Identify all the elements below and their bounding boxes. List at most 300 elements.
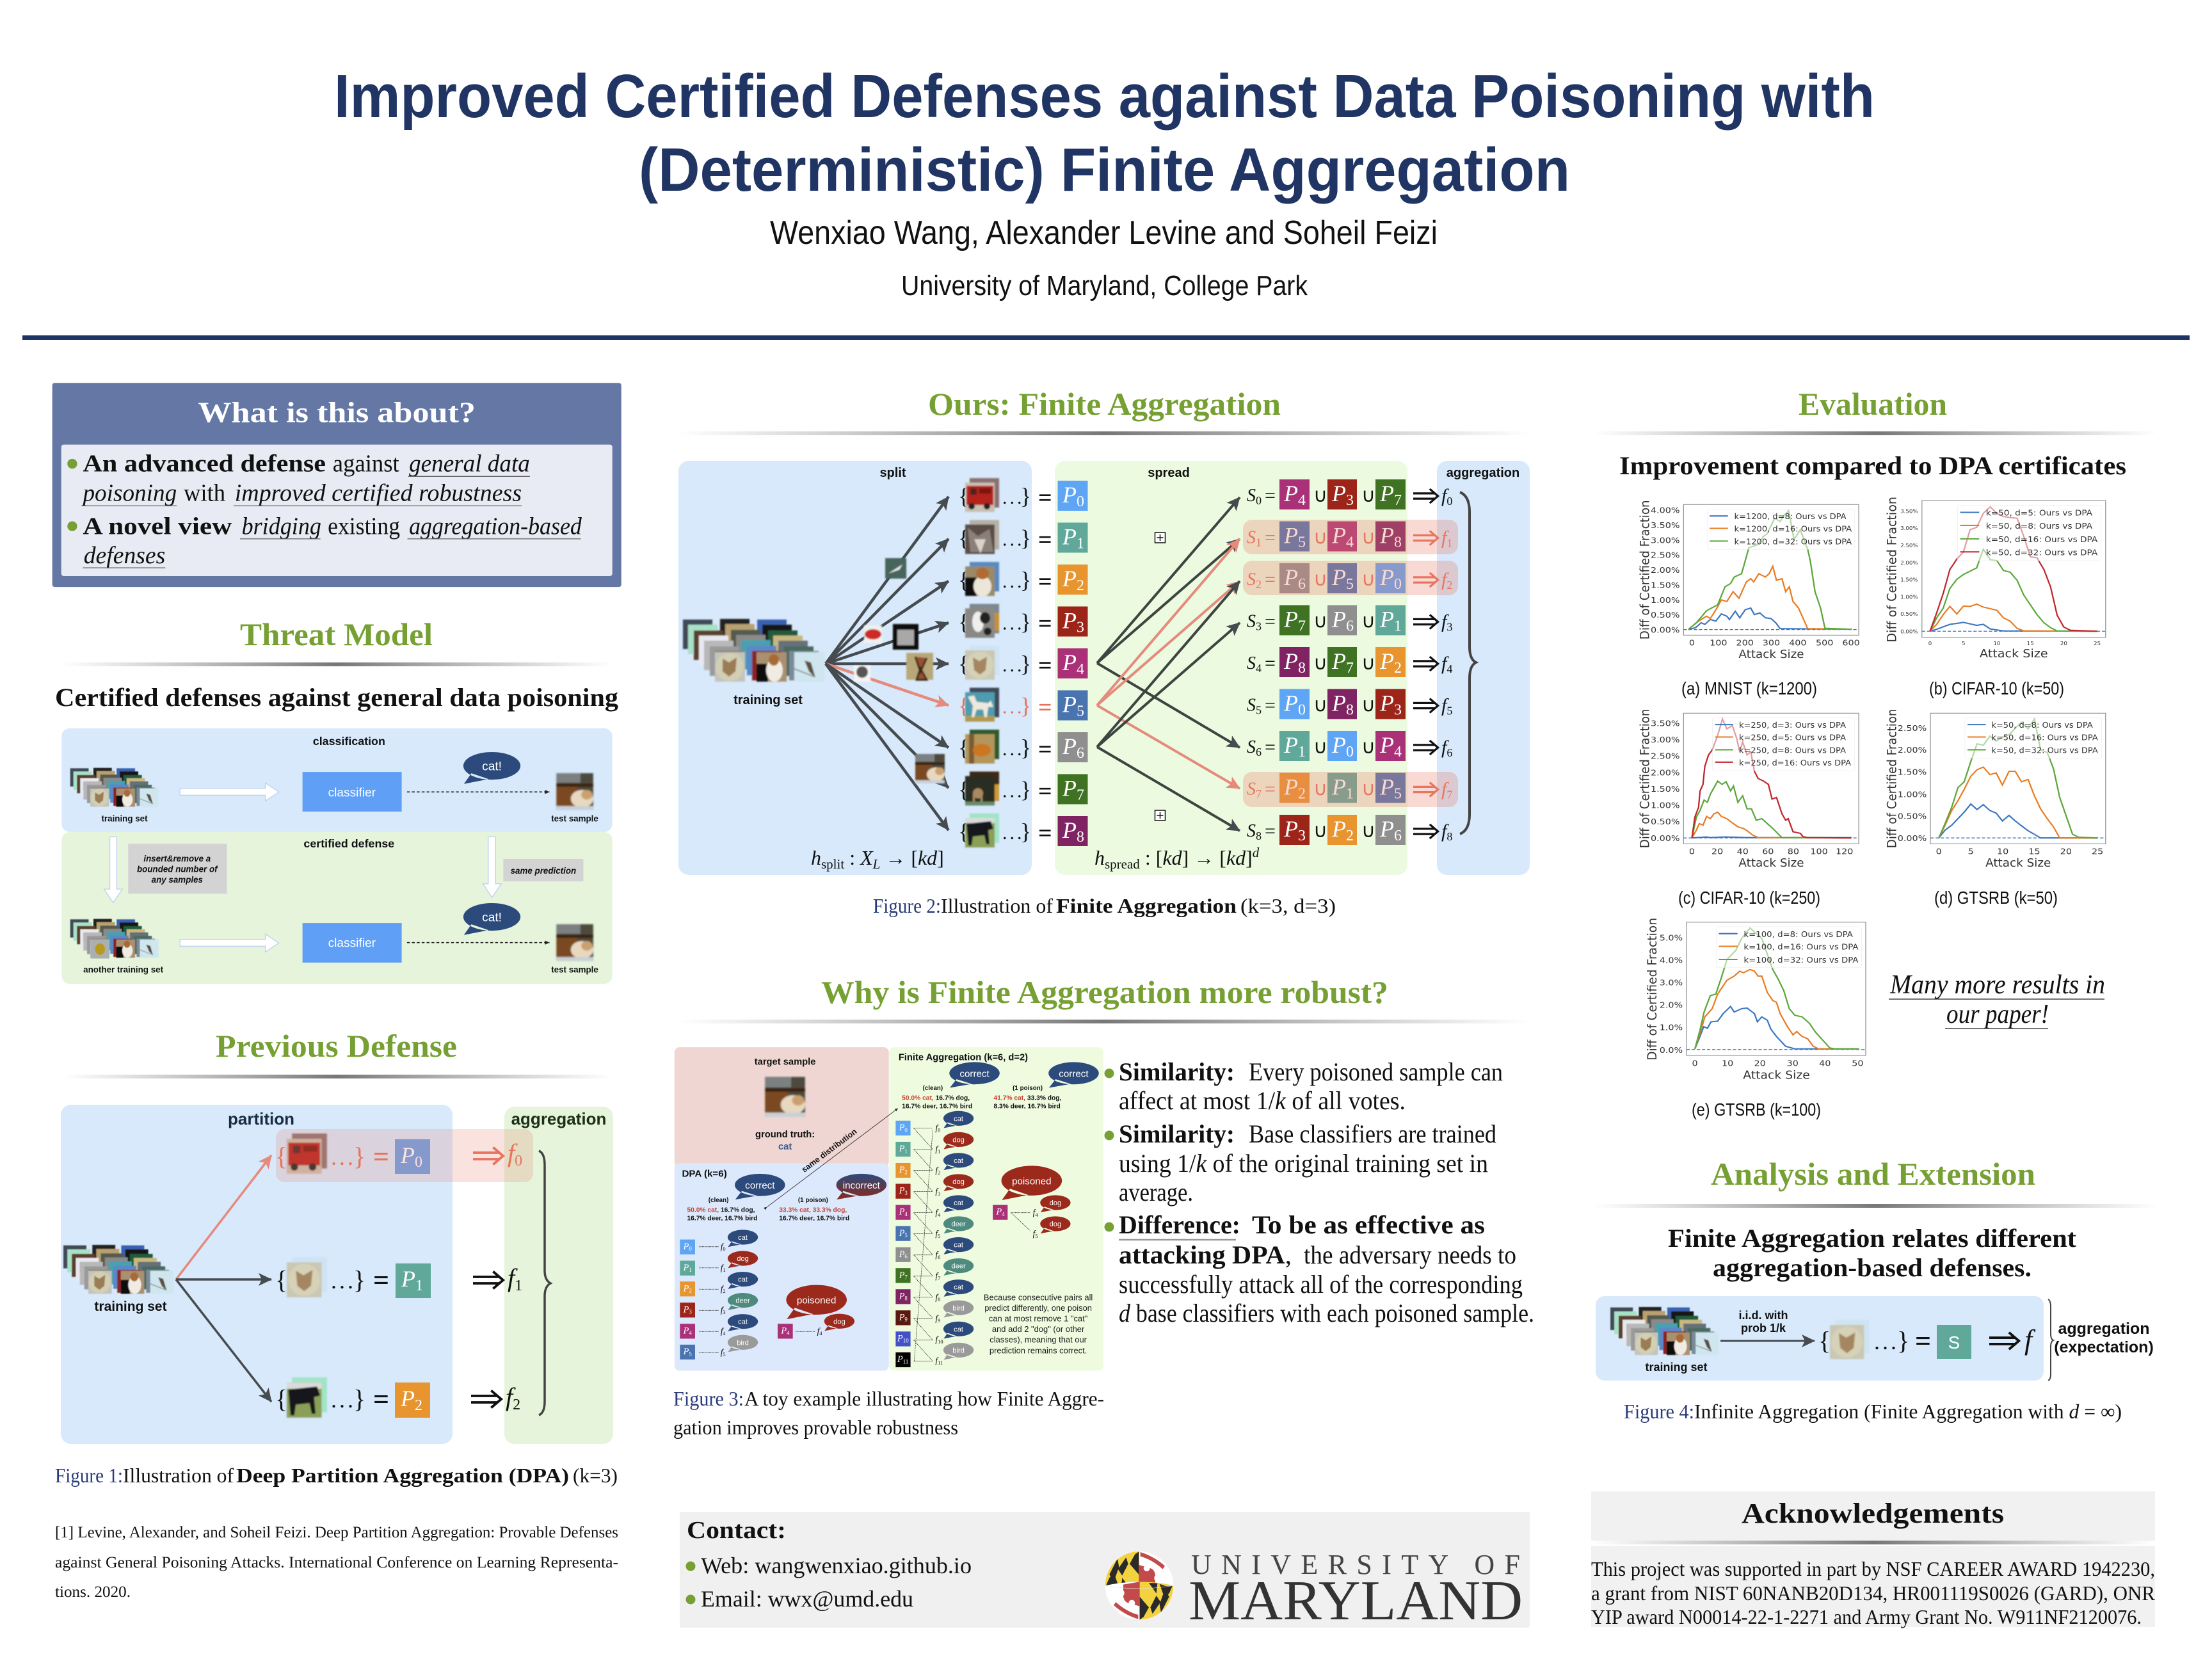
chart: MNIST: 1.50% <box>1651 581 1680 590</box>
subheading: finite aggregation relates <box>1668 1224 2077 1282</box>
FA classifier labels: f <box>935 1292 938 1302</box>
subset: = <box>1915 1326 1931 1357</box>
set S2: ∪ <box>1313 569 1327 590</box>
comparison bullets: affect at most 1/k of all votes. <box>1119 1086 1406 1115</box>
row P5: { <box>958 693 969 718</box>
panel: what is this about: improved certified robustness <box>235 480 522 507</box>
panel: what is this about: bridging <box>242 513 321 540</box>
FA tiles: P <box>899 1165 904 1175</box>
comparison bullets: To be as effective as <box>1252 1210 1485 1239</box>
set S0: 0 <box>1447 495 1452 508</box>
chart: GTSRB k=100: 1.0% <box>1660 1023 1683 1032</box>
FA classifier labels: f <box>935 1229 938 1238</box>
panel: what is this about: general data <box>409 451 530 477</box>
set S5: = <box>1265 695 1276 716</box>
formula: split: X <box>860 846 873 869</box>
FA tiles: 3 <box>904 1190 908 1196</box>
row P6: 6 <box>1077 745 1084 762</box>
figure 4 caption: Infinite Aggregation (Finite Aggregation with d = ∞) <box>1694 1400 2122 1423</box>
set S2: f <box>1441 569 1447 590</box>
row P8: { <box>958 819 969 844</box>
classifier f0: f <box>508 1139 515 1167</box>
title: (Deterministic) Finite Aggregation <box>639 136 1570 204</box>
arrows <box>176 1155 271 1402</box>
chart: MNIST: 600 <box>1842 638 1860 648</box>
FA poisoned example: P <box>996 1207 1002 1217</box>
FA explanation: predict differently, one poison <box>984 1303 1092 1313</box>
set S8: 8 <box>1256 830 1262 842</box>
formula: split: : <box>844 846 860 869</box>
row P2: = <box>1038 568 1052 595</box>
partition rows: } <box>1020 483 1031 509</box>
set S8: S <box>1247 821 1256 841</box>
same distribution arrow <box>767 1109 898 1207</box>
row P6: { <box>958 735 969 760</box>
set S1 <box>1247 521 1452 552</box>
set S0: ∪ <box>1313 485 1327 506</box>
panel: finite aggregation example: 16.7% deer, 16.7% bird <box>902 1103 972 1110</box>
FA classifier labels: 1 <box>938 1148 940 1155</box>
chart: MNIST: 3.00% <box>1651 536 1680 545</box>
chart: CIFAR-10 k=50: k=50, d=16: Ours vs DPA <box>1986 535 2098 545</box>
FA classifier labels <box>935 1123 943 1366</box>
set S1: P <box>1332 522 1346 548</box>
note: insert remove: bounded number of <box>137 864 218 874</box>
set S3: = <box>1265 611 1276 632</box>
set S8: P <box>1284 816 1298 842</box>
another training set <box>70 919 164 974</box>
row P5 <box>958 687 1088 722</box>
partition P2: } <box>353 1384 365 1413</box>
set S7: ∪ <box>1361 778 1375 800</box>
down arrow left <box>104 837 122 902</box>
row P5: 5 <box>1077 703 1084 719</box>
classifier <box>1989 1324 2036 1356</box>
row P2: ... <box>1002 571 1024 592</box>
chart: MNIST: 300 <box>1763 638 1780 648</box>
chart: MNIST: 2.50% <box>1651 550 1680 560</box>
FA classifier labels: 5 <box>938 1233 940 1239</box>
set S4: f <box>1441 653 1447 674</box>
partition P1: } <box>353 1265 365 1294</box>
formula: spread: spread <box>1105 856 1140 872</box>
partition P2: ... <box>331 1387 356 1413</box>
subheading: improvement: Improvement compared to DPA certificates <box>1619 451 2126 480</box>
chart: CIFAR-10 k=250: k=250, d=3: Ours vs DPA <box>1739 721 1847 730</box>
set S1: f <box>1441 527 1447 548</box>
partition P2: 2 <box>415 1397 422 1414</box>
aggregation panel <box>1437 461 1530 875</box>
set S0: P <box>1284 481 1298 506</box>
row P7: ... <box>1002 781 1024 801</box>
FA poisoned example <box>993 1166 1071 1239</box>
partition P0: 0 <box>415 1154 422 1171</box>
caption b: (b) CIFAR-10 (k=50) <box>1929 678 2064 698</box>
row P3: P <box>1062 608 1077 634</box>
chart: GTSRB k=100: 0.0% <box>1660 1046 1683 1055</box>
set S6: 0 <box>1346 744 1354 760</box>
panel: finite aggregation example: (1 poison) <box>1013 1085 1043 1092</box>
partition P0: { <box>275 1142 287 1171</box>
maryland globe <box>1105 1551 1173 1620</box>
chart: CIFAR-10 k=250 <box>1638 709 1859 870</box>
FA classifier labels: 3 <box>938 1190 940 1197</box>
set S2 <box>1247 563 1452 593</box>
DPA tiles: 4 <box>689 1330 692 1336</box>
formula: split: → [ <box>880 846 918 869</box>
set S1: 5 <box>1298 534 1306 550</box>
set S4: P <box>1332 648 1346 674</box>
highlights <box>1243 520 1458 807</box>
chart: GTSRB k=50 <box>1886 709 2106 870</box>
chart: MNIST <box>1638 500 1860 661</box>
DPA arrows <box>699 1247 719 1352</box>
DPA votes: cat <box>738 1318 748 1326</box>
panel: acknowledgements <box>1591 1491 2156 1628</box>
FA classifier labels: 4 <box>938 1212 941 1218</box>
row P7: P <box>1062 776 1077 801</box>
set S4: P <box>1284 648 1298 674</box>
set S0: f <box>1441 485 1447 506</box>
FA explanation: can at most remove 1 "cat" <box>989 1314 1088 1324</box>
set S4: ∪ <box>1361 653 1375 674</box>
set S3: 6 <box>1346 618 1354 635</box>
DPA classifier labels: f <box>721 1242 723 1251</box>
chart: CIFAR-10 k=250: 2.00% <box>1651 768 1680 778</box>
partition P0: ... <box>331 1144 356 1170</box>
chart: GTSRB k=50: 0.50% <box>1898 812 1927 821</box>
partition P2: = <box>373 1384 389 1415</box>
chart: GTSRB k=100: 5.0% <box>1660 933 1683 943</box>
note: same prediction: same prediction <box>511 866 576 876</box>
figure 4 caption: Figure 4: <box>1624 1400 1694 1423</box>
DPA votes <box>728 1230 758 1352</box>
row P7: 7 <box>1077 787 1084 804</box>
classifier f1: 1 <box>515 1278 522 1294</box>
subset: } <box>1897 1326 1909 1355</box>
row P5: } <box>1020 693 1031 718</box>
DPA poisoned example <box>778 1285 854 1338</box>
chart: CIFAR-10 k=50: 0.00% <box>1900 629 1918 634</box>
set S3: f <box>1441 611 1447 632</box>
set S2: = <box>1265 569 1276 590</box>
set S5: P <box>1284 690 1298 716</box>
training set <box>1610 1307 1719 1374</box>
chart: CIFAR-10 k=50: 20 <box>2060 641 2067 646</box>
classifier box <box>303 923 402 963</box>
another training set: another training set <box>83 965 164 974</box>
diagram: threat model: classification <box>313 735 385 748</box>
DPA poisoned example: f <box>817 1326 819 1336</box>
FA votes <box>943 1111 974 1360</box>
DPA tiles: 5 <box>689 1350 692 1357</box>
row P8: = <box>1038 820 1052 847</box>
DPA tiles: P <box>684 1326 689 1336</box>
set S6: 6 <box>1256 746 1262 758</box>
expand icon <box>1155 810 1165 821</box>
partition rows: ... <box>1002 487 1024 508</box>
set S7: 1 <box>1346 786 1354 803</box>
chart: GTSRB k=100: 3.0% <box>1660 978 1683 988</box>
floating samples <box>854 558 933 682</box>
row P1: 1 <box>1077 535 1084 552</box>
heading: evaluation: Evaluation <box>1799 386 1947 422</box>
chart: GTSRB k=50: 0 <box>1936 847 1942 856</box>
FA classifier labels: f <box>935 1166 938 1175</box>
FA votes: deer <box>951 1263 966 1270</box>
set S8: ∪ <box>1313 821 1327 842</box>
chart: GTSRB k=100: 0 <box>1692 1059 1698 1068</box>
set S3: 7 <box>1298 618 1306 635</box>
row P2: P <box>1062 566 1077 591</box>
chart: CIFAR-10 k=250: 80 <box>1788 847 1799 856</box>
chart: CIFAR-10 k=50: k=50, d=5: Ours vs DPA <box>1986 508 2093 518</box>
chart: MNIST: 400 <box>1789 638 1806 648</box>
set S4: P <box>1380 648 1394 674</box>
set S7: ∪ <box>1313 778 1327 800</box>
chart: CIFAR-10 k=250: 3.00% <box>1651 735 1680 745</box>
chart: GTSRB k=100: 40 <box>1819 1059 1831 1068</box>
row P3: = <box>1038 611 1052 637</box>
FA classifier labels: 8 <box>938 1296 940 1302</box>
set S0: 3 <box>1346 492 1354 509</box>
set S5 <box>1247 689 1452 719</box>
DPA tiles: 0 <box>689 1246 692 1252</box>
classifier f1 <box>473 1263 522 1294</box>
prediction <box>463 752 520 784</box>
figure 4: infinite aggregation <box>1596 1296 2154 1381</box>
aggregation label: (expectation) <box>2054 1338 2154 1356</box>
dashed arrow <box>407 791 549 793</box>
subset: ... <box>1874 1329 1899 1354</box>
set S1: 1 <box>1447 536 1452 549</box>
FA tiles: 6 <box>904 1253 908 1260</box>
diagram: threat model <box>61 728 613 984</box>
classifier f1: f <box>508 1263 515 1292</box>
set S5: 5 <box>1447 704 1452 717</box>
authors: Wenxiao Wang, Alexander Levine and Soheil Feizi <box>770 214 1438 252</box>
FA tiles: 2 <box>904 1169 908 1175</box>
panel: what is this about: A novel view <box>83 513 232 540</box>
FA classifier labels: 6 <box>938 1254 940 1260</box>
training set: training set <box>94 1299 167 1314</box>
figure 1: deep partition aggregation <box>61 1105 613 1444</box>
FA tiles <box>895 1121 911 1367</box>
chart: CIFAR-10 k=50: 0 <box>1928 641 1932 646</box>
row P4 <box>958 646 1088 680</box>
FA tiles: P <box>899 1144 904 1154</box>
same distribution arrow: same distribution <box>800 1127 858 1174</box>
DPA poisoned example: 4 <box>819 1330 822 1336</box>
logo: university of maryland: UNIVERSITY OF <box>1191 1549 1520 1580</box>
formula: spread: d <box>1253 845 1260 860</box>
figure 2 caption: Figure 2: <box>873 894 941 917</box>
FA classifier labels: f <box>935 1208 938 1217</box>
subset tile <box>1937 1325 1971 1359</box>
panel: finite aggregation example <box>889 1047 1103 1370</box>
figure 1 caption: (k=3) <box>573 1464 618 1487</box>
panel: acknowledgements: Acknowledgements <box>1742 1498 2004 1529</box>
row P1: ... <box>1002 529 1024 550</box>
chart: GTSRB k=50: k=50, d=16: Ours vs DPA <box>1991 733 2098 742</box>
panel: finite aggregation example: correct <box>959 1069 990 1080</box>
figure 1: deep partition aggregation: aggregation <box>511 1109 606 1128</box>
FA classifier labels: 2 <box>938 1169 940 1176</box>
chart: CIFAR-10 k=250: 60 <box>1762 847 1774 856</box>
row P8 <box>958 813 1088 847</box>
training set: training set <box>733 693 803 707</box>
chart: MNIST: Diff of Certified Fraction <box>1638 500 1653 639</box>
chart: CIFAR-10 k=250: Diff of Certified Fraction <box>1638 709 1653 848</box>
chart: MNIST: k=1200, d=16: Ours vs DPA <box>1735 524 1852 534</box>
partition rows: = <box>1038 485 1052 511</box>
figure 2: finite aggregation diagram: aggregation <box>1447 466 1519 480</box>
training set <box>63 1245 173 1314</box>
FA explanation <box>984 1293 1093 1355</box>
set S5: P <box>1332 690 1346 716</box>
DPA votes: cat <box>738 1234 748 1242</box>
FA votes: cat <box>954 1199 964 1207</box>
set S3: 1 <box>1394 618 1402 635</box>
DPA tiles: P <box>684 1347 689 1357</box>
set S6: 4 <box>1394 744 1402 760</box>
DPA classifier labels: f <box>721 1305 723 1315</box>
set S3: P <box>1332 607 1346 632</box>
partition P1: { <box>275 1265 287 1294</box>
panel: DPA <box>675 1163 889 1370</box>
chart: GTSRB k=100: Attack Size <box>1743 1070 1810 1082</box>
FA votes: cat <box>954 1284 964 1292</box>
chart: GTSRB k=100: 10 <box>1722 1059 1733 1068</box>
chart: GTSRB k=50: 0.00% <box>1898 833 1927 844</box>
block arrow <box>180 934 279 952</box>
row P7 <box>958 772 1088 805</box>
chart: CIFAR-10 k=250: k=250, d=8: Ours vs DPA <box>1739 746 1847 755</box>
reference: against General Poisoning Attacks. International Conference on Learning Representa- <box>55 1554 618 1571</box>
FA poisoned example: 4 <box>1002 1211 1005 1217</box>
panel: DPA: (1 poison) <box>798 1197 828 1204</box>
chart: CIFAR-10 k=250: 0.00% <box>1651 833 1680 844</box>
chart: CIFAR-10 k=50: 0.50% <box>1900 611 1918 617</box>
partition P2 <box>275 1377 430 1418</box>
row P8: ... <box>1002 822 1024 844</box>
FA tiles: P <box>899 1312 904 1322</box>
FA poisoned example: dog <box>1050 1199 1061 1207</box>
sampling arrow: prob 1/k <box>1741 1322 1786 1334</box>
FA classifier labels: 7 <box>938 1275 940 1281</box>
chart: MNIST: 200 <box>1736 638 1754 648</box>
row P4: ... <box>1002 655 1024 676</box>
FA tiles: P <box>897 1354 903 1365</box>
set S3: P <box>1380 607 1394 632</box>
FA tiles: 1 <box>904 1148 908 1154</box>
figure 1 caption: Illustration of <box>123 1464 234 1487</box>
classifier box <box>303 772 402 812</box>
title: Improved Certified Defenses against Data Poisoning with <box>334 62 1875 131</box>
set S0: P <box>1332 481 1346 506</box>
partition P0 <box>275 1134 430 1174</box>
chart: CIFAR-10 k=50: Attack Size <box>1980 648 2048 661</box>
set S1: P <box>1380 522 1394 548</box>
chart: CIFAR-10 k=50: k=50, d=8: Ours vs DPA <box>1986 522 2093 531</box>
chart: GTSRB k=50: 2.50% <box>1898 724 1927 733</box>
chart: GTSRB k=100: k=100, d=16: Ours vs DPA <box>1743 942 1859 952</box>
chart: GTSRB k=100: k=100, d=8: Ours vs DPA <box>1743 930 1854 940</box>
panel: target sample: ground truth: <box>755 1130 815 1140</box>
set S7: 5 <box>1394 786 1402 803</box>
figure 1: deep partition aggregation: partition <box>228 1109 294 1128</box>
partition P0: } <box>353 1142 365 1171</box>
heading: finite aggregation: Ours: Finite Aggregation <box>928 386 1281 422</box>
FA poisoned example: 4 <box>1035 1212 1038 1218</box>
DPA classifier labels: 1 <box>723 1267 726 1273</box>
row P6 <box>958 730 1088 764</box>
panel: DPA: incorrect <box>843 1180 881 1191</box>
set S3: P <box>1284 607 1298 632</box>
set S6: S <box>1247 737 1256 757</box>
chart: CIFAR-10 k=250: 0 <box>1689 847 1695 856</box>
FA classifier labels: f <box>935 1334 938 1344</box>
set S1: 1 <box>1256 536 1262 549</box>
classifier box: classifier <box>328 937 376 950</box>
FA classifier labels: 9 <box>938 1317 940 1324</box>
partition P0: P <box>401 1142 415 1168</box>
row P1 <box>958 520 1088 554</box>
set S4: 7 <box>1346 660 1354 677</box>
DPA votes: bird <box>737 1339 749 1347</box>
chart: GTSRB k=50: k=50, d=8: Ours vs DPA <box>1991 721 2093 730</box>
FA poisoned example: poisoned <box>1012 1176 1052 1187</box>
set S3: ∪ <box>1313 611 1327 632</box>
highlight <box>276 1129 533 1182</box>
chart: CIFAR-10 k=50: 10 <box>1993 641 2000 646</box>
set S4: S <box>1247 653 1256 673</box>
expectation brace <box>2048 1299 2053 1381</box>
set S8 <box>1247 815 1452 845</box>
caption a: (a) MNIST (k=1200) <box>1681 678 1817 698</box>
note: same prediction <box>503 859 583 881</box>
panel: finite aggregation example: 8.3% deer, 16.7% bird <box>993 1103 1061 1110</box>
chart: GTSRB k=100 <box>1646 918 1866 1082</box>
FA votes: cat <box>954 1157 964 1165</box>
caption d: (d) GTSRB (k=50) <box>1934 888 2058 908</box>
set S7: P <box>1380 774 1394 800</box>
chart: CIFAR-10 k=250: 40 <box>1737 847 1749 856</box>
row P1: = <box>1038 526 1052 553</box>
partition rows: 0 <box>1077 493 1084 510</box>
set S7: 2 <box>1298 786 1306 803</box>
set S6: ∪ <box>1361 737 1375 758</box>
FA explanation: prediction remains correct. <box>990 1345 1087 1355</box>
FA tiles: P <box>899 1249 904 1260</box>
partition P1: P <box>401 1266 415 1292</box>
DPA classifier labels: 5 <box>723 1351 726 1358</box>
figure 2 caption: (k=3, d=3) <box>1240 894 1336 917</box>
note: insert remove: insert&remove a <box>143 854 211 863</box>
FA tiles: 10 <box>903 1338 909 1344</box>
logo: university of maryland: MARYLAND <box>1189 1570 1523 1632</box>
FA classifier labels: f <box>935 1187 938 1196</box>
partition P2: { <box>275 1384 287 1413</box>
set S0: ∪ <box>1361 485 1375 506</box>
formula: spread: : [ <box>1140 846 1162 869</box>
formula: split: L <box>872 856 880 872</box>
heading: threat model: Threat Model <box>240 616 433 652</box>
comparison bullets: d base classifiers with each poisoned sample. <box>1119 1299 1534 1327</box>
chart: CIFAR-10 k=250: 2.50% <box>1651 751 1680 761</box>
set S8: 8 <box>1447 830 1452 843</box>
sampling arrow <box>1720 1309 1815 1341</box>
